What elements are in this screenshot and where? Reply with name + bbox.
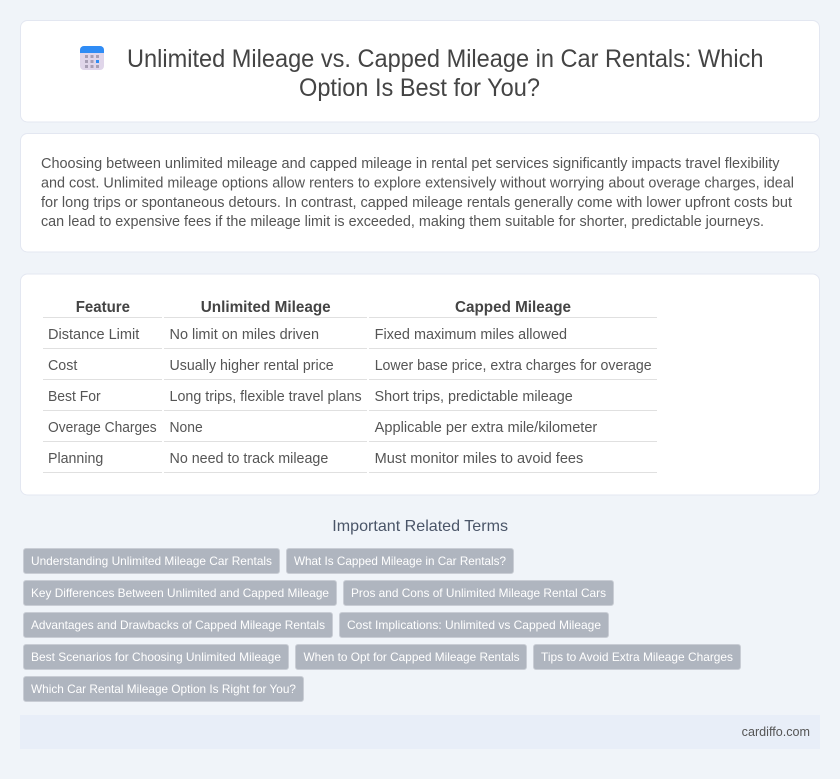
- text block: introduction paragraph: Choosing between unlimited mileage and capped mileage in rental pet services significantly impacts travel flexibility: [41, 156, 780, 172]
- icon: calendar: [80, 46, 104, 70]
- table header row: [43, 299, 657, 318]
- table row: cost: Cost: [48, 358, 77, 374]
- chip: [286, 548, 514, 574]
- chip: [340, 612, 608, 638]
- chip: [24, 676, 304, 702]
- panel: introduction: [20, 134, 820, 252]
- related term chips: [24, 548, 740, 702]
- text block: introduction paragraph: for long trips or spontaneous detours. In contrast, capped mileage rentals generally come with lower upfront costs but: [41, 195, 792, 211]
- table row: best for: Best For: [48, 389, 101, 405]
- chip: Which Car Rental Mileage Option Is Right for You?: [31, 682, 296, 696]
- footer: cardiffo.com: [742, 725, 810, 739]
- chip: Pros and Cons of Unlimited Mileage Rental Cars: [351, 586, 606, 600]
- chip: [296, 644, 526, 670]
- title: Unlimited Mileage vs. Capped Mileage in Car Rentals: Which: [127, 45, 764, 73]
- table row: cost: Lower base price, extra charges for overage: [375, 358, 652, 374]
- chip: [24, 612, 332, 638]
- table row: distance limit: [43, 327, 657, 348]
- table header row: Capped Mileage: [455, 299, 571, 316]
- heading: important related terms: Important Related Terms: [332, 518, 508, 535]
- title: [127, 45, 764, 102]
- table header row: Unlimited Mileage: [201, 299, 331, 316]
- table row: distance limit: Distance Limit: [48, 327, 139, 343]
- table row: distance limit: No limit on miles driven: [170, 327, 319, 343]
- table row: best for: Short trips, predictable mileage: [374, 389, 573, 405]
- table row: planning: Planning: [48, 451, 103, 467]
- chip: [24, 644, 288, 670]
- chip: Tips to Avoid Extra Mileage Charges: [541, 650, 733, 664]
- table row: overage charges: [43, 420, 657, 442]
- table row: cost: [43, 358, 657, 380]
- table row: best for: [43, 389, 657, 410]
- footer: [20, 715, 820, 749]
- panel: comparison table: [20, 274, 820, 495]
- table row: overage charges: Overage Charges: [48, 420, 157, 436]
- text block: introduction paragraph: can lead to expensive fees if the mileage limit is exceeded, making them suitable for shorter, predictable journeys.: [41, 214, 764, 230]
- table row: overage charges: None: [170, 420, 203, 436]
- chip: Cost Implications: Unlimited vs Capped Mileage: [347, 618, 601, 632]
- table row: planning: Must monitor miles to avoid fees: [375, 451, 583, 467]
- text block: introduction paragraph: and cost. Unlimited mileage options allow renters to explore extensively without worrying about overage charges, ideal: [41, 176, 794, 192]
- chip: Advantages and Drawbacks of Capped Mileage Rentals: [31, 618, 325, 632]
- panel: header: [20, 20, 820, 122]
- text block: introduction paragraph: [41, 156, 794, 230]
- chip: [24, 580, 336, 606]
- title: Option Is Best for You?: [299, 74, 540, 102]
- table row: distance limit: Fixed maximum miles allowed: [375, 327, 567, 343]
- chip: [344, 580, 614, 606]
- chip: [534, 644, 740, 670]
- chip: When to Opt for Capped Mileage Rentals: [304, 650, 520, 664]
- table row: planning: [43, 451, 657, 472]
- table row: overage charges: Applicable per extra mile/kilometer: [375, 420, 598, 436]
- chip: Key Differences Between Unlimited and Capped Mileage: [31, 586, 329, 600]
- table row: best for: Long trips, flexible travel plans: [170, 389, 362, 405]
- chip: [24, 548, 280, 574]
- chip: Best Scenarios for Choosing Unlimited Mileage: [31, 650, 281, 664]
- chip: Understanding Unlimited Mileage Car Rentals: [31, 554, 272, 568]
- table row: cost: Usually higher rental price: [170, 358, 334, 374]
- chip: What Is Capped Mileage in Car Rentals?: [294, 554, 506, 568]
- table header row: Feature: [76, 299, 130, 316]
- table row: planning: No need to track mileage: [170, 451, 328, 467]
